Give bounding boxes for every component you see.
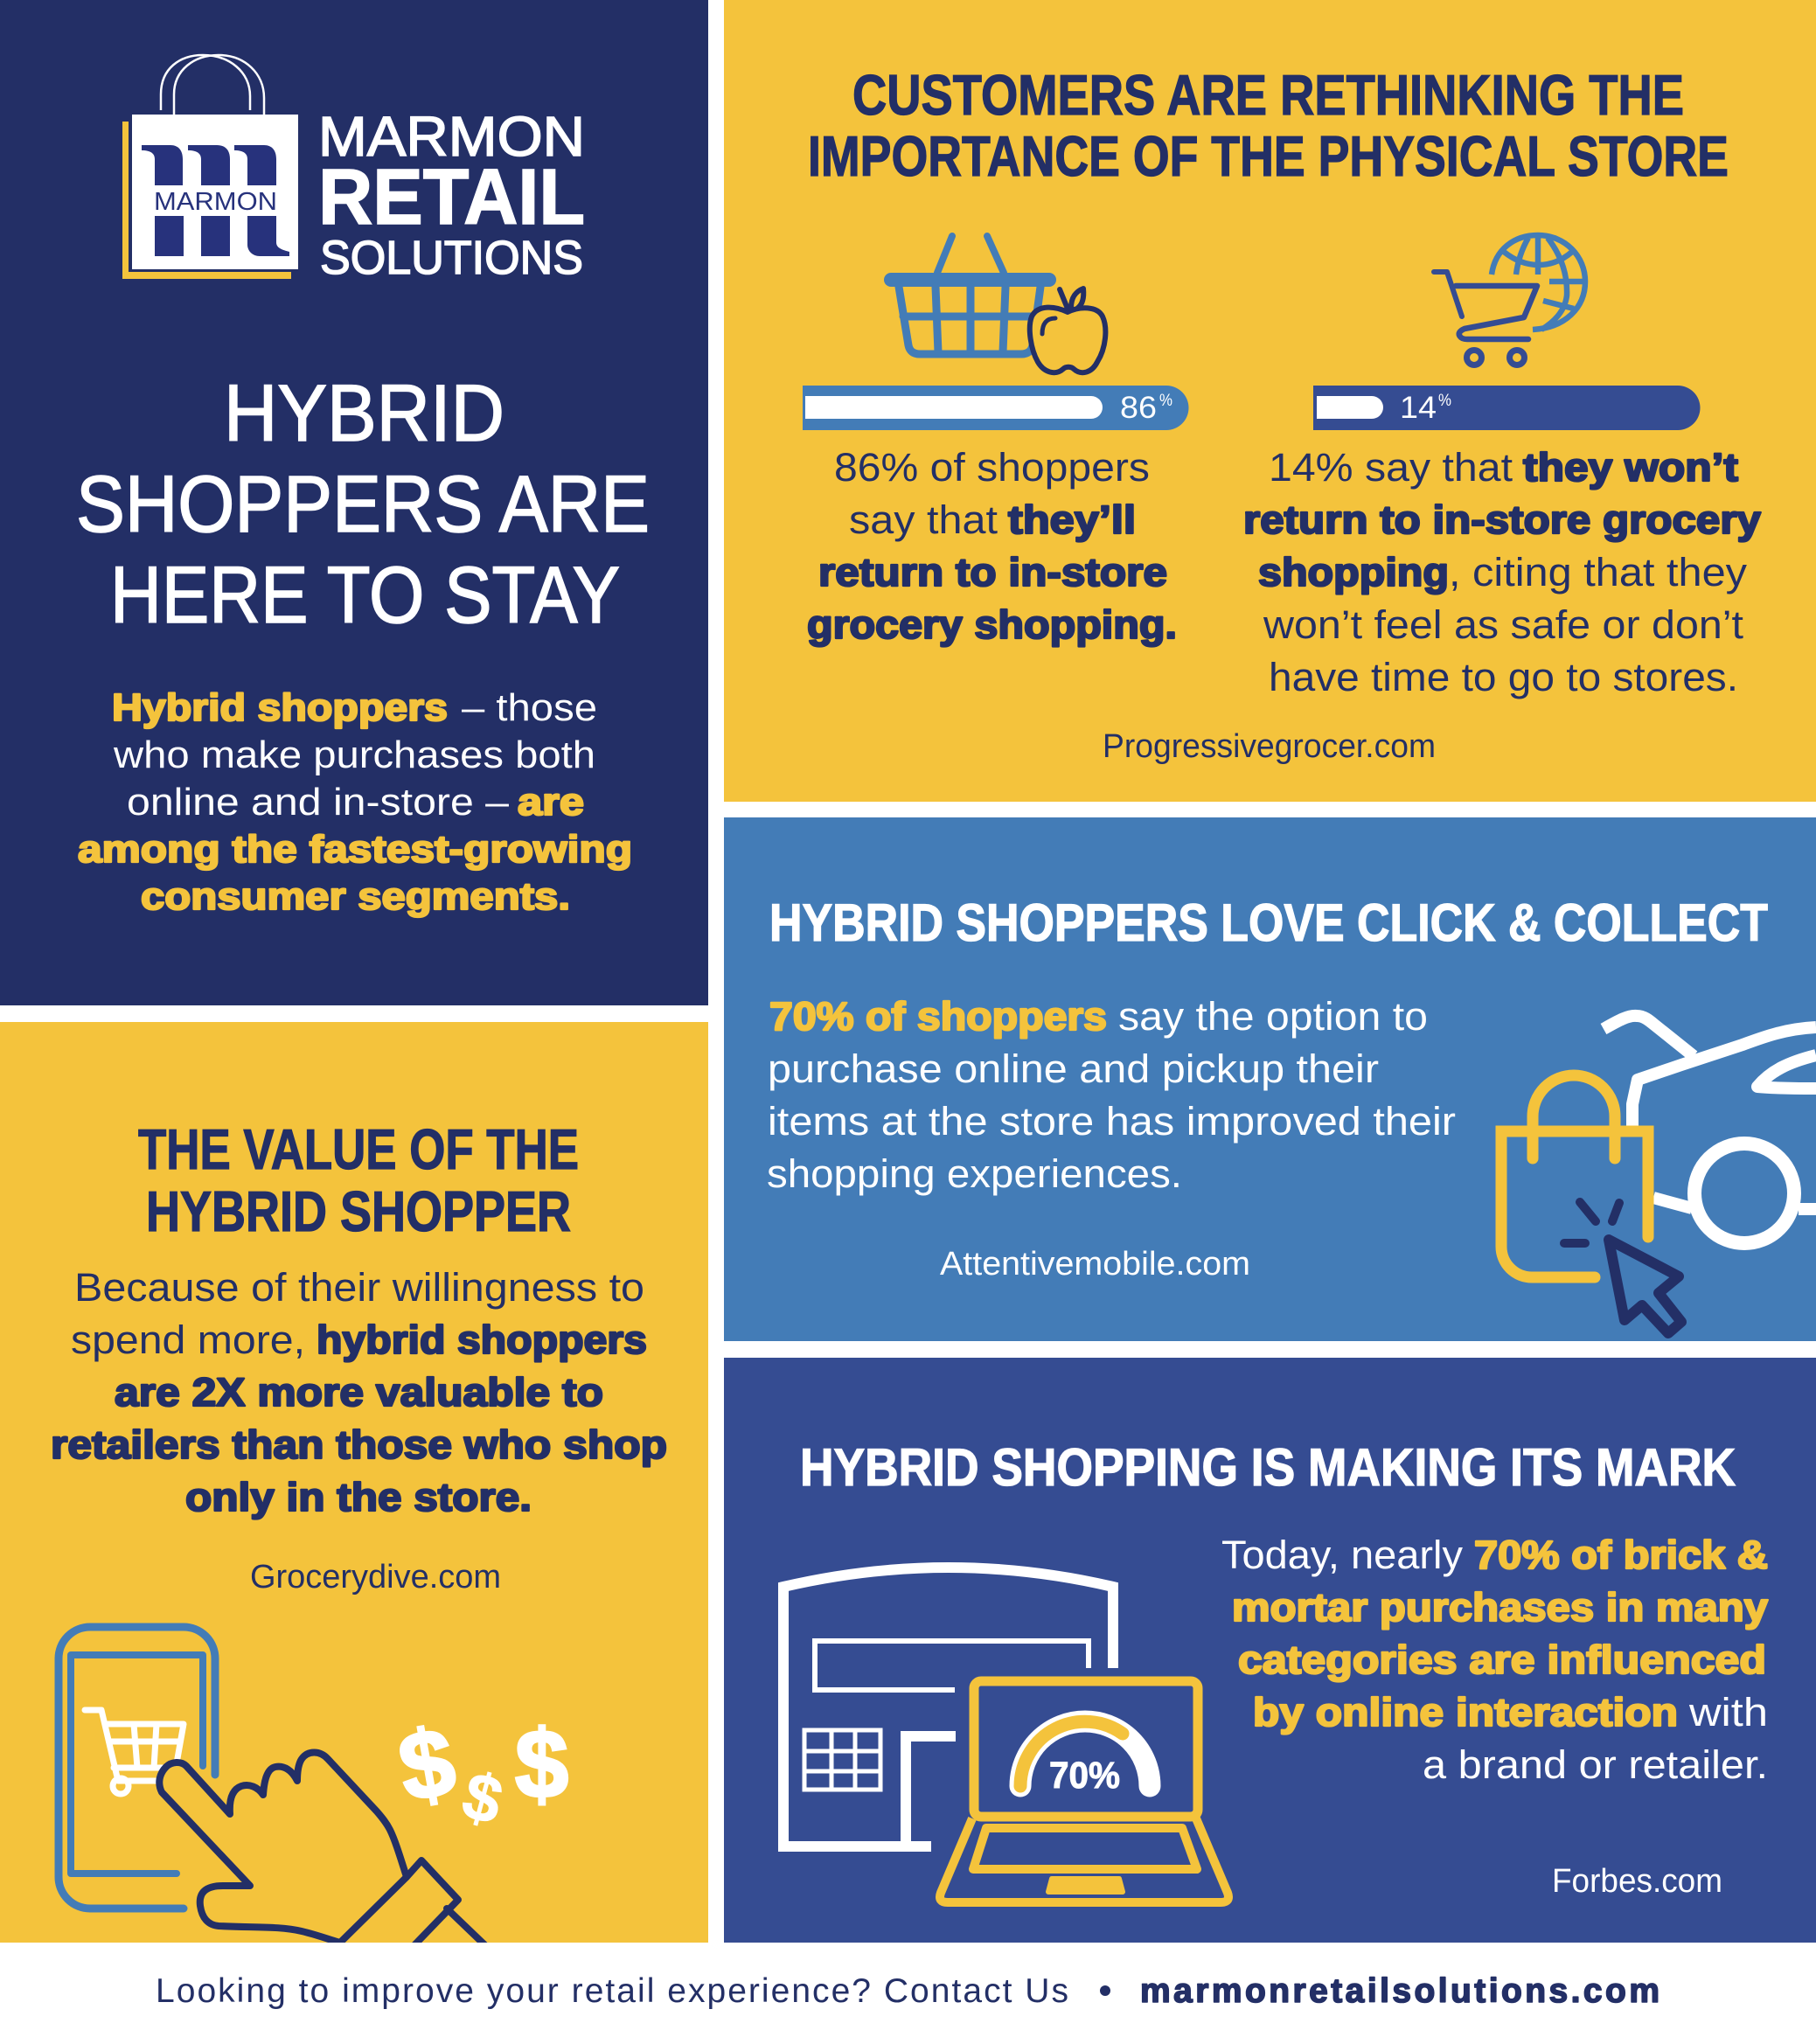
text block: 14 percent: 14% say that	[1269, 445, 1513, 490]
logo: Marmon Retail Solutions: RETAIL	[318, 154, 585, 241]
text block: with	[1688, 1690, 1768, 1735]
progress bar: 14%	[1313, 386, 1701, 430]
text block: 86 percent: say that	[849, 497, 998, 542]
text block: definition: consumer segments.	[141, 875, 570, 918]
text block: 14 percent: have time to go to stores.	[1269, 655, 1738, 699]
text block: definition: – those	[462, 686, 597, 729]
source: Attentivemobile.com	[940, 1246, 1250, 1283]
progress bar: 14%: 14	[1400, 391, 1437, 425]
gauge	[1020, 1721, 1150, 1797]
text block: 86 percent: grocery shopping.	[807, 602, 1177, 647]
text block: 86 percent: they’ll	[1008, 497, 1136, 542]
text block: definition: are	[518, 781, 584, 824]
panel: value of the hybrid shopper	[0, 1022, 708, 1950]
text block: categories are influenced	[1238, 1637, 1766, 1682]
icon: dollar signs	[392, 1707, 568, 1839]
footer: marmonretailsolutions.com	[1140, 1972, 1659, 2010]
text block: definition: online and in-store –	[127, 781, 510, 824]
text block: 14 percent: return to in-store grocery	[1243, 497, 1761, 542]
text block: mortar purchases in many	[1232, 1585, 1768, 1630]
icon: phone with cart and hand	[59, 1627, 490, 1950]
text block: definition: among the fastest-growing	[78, 828, 632, 871]
text block: Today, nearly	[1221, 1533, 1464, 1577]
heading	[138, 1117, 579, 1243]
heading: HYBRID SHOPPER	[146, 1179, 571, 1243]
title: HYBRID	[224, 369, 504, 458]
text block: retailers than those who shop	[51, 1422, 667, 1467]
text block: definition: Hybrid shoppers	[112, 686, 448, 729]
progress bar: 86%	[803, 386, 1189, 430]
text block	[767, 994, 1456, 1196]
text block: items at the store has improved their	[768, 1099, 1456, 1144]
icon: store	[783, 1568, 1113, 1846]
progress bar: 14%: %	[1438, 392, 1451, 410]
text block: 14 percent: they won’t	[1523, 445, 1738, 490]
source: Progressivegrocer.com	[1103, 728, 1436, 765]
text block: 86 percent: 86% of shoppers	[834, 445, 1150, 490]
text block: spend more,	[71, 1317, 305, 1362]
source: Grocerydive.com	[250, 1559, 501, 1596]
text block: say the option to	[1118, 994, 1428, 1039]
text block: definition	[78, 686, 632, 918]
panel: click and collect	[724, 817, 1816, 1341]
text block: 86 percent	[807, 445, 1177, 647]
logo: Marmon Retail Solutions	[122, 55, 585, 284]
progress bar: 86%: 86	[1120, 391, 1157, 425]
panel: intro	[0, 0, 708, 1005]
text block: 14 percent	[1243, 445, 1761, 699]
icon: cart and globe	[1434, 235, 1587, 365]
text block: 86 percent: return to in-store	[818, 550, 1167, 594]
text block: 14 percent: won’t feel as safe or don’t	[1263, 602, 1744, 647]
panel: rethinking the physical store	[724, 0, 1816, 802]
logo: Marmon Retail Solutions: MARMON	[154, 188, 277, 216]
panel: making its mark	[724, 1358, 1816, 1943]
icon: basket and apple	[884, 236, 1105, 372]
title: SHOPPERS ARE	[76, 460, 650, 549]
text block: 70% of brick &	[1474, 1533, 1768, 1577]
text block: only in the store.	[185, 1475, 532, 1519]
footer	[156, 1972, 1659, 2010]
icon: dollar signs: $	[515, 1711, 568, 1818]
text block: 14 percent: , citing that they	[1449, 550, 1748, 594]
text block: 14 percent: shopping	[1258, 550, 1449, 594]
text block: shopping experiences.	[767, 1151, 1182, 1196]
icon: car	[1604, 1016, 1816, 1243]
title	[76, 369, 650, 640]
text block: Because of their willingness to	[74, 1265, 644, 1310]
progress bar: 86%: %	[1159, 392, 1172, 410]
title: HERE TO STAY	[110, 551, 620, 640]
text block: hybrid shoppers	[317, 1317, 647, 1362]
logo: Marmon Retail Solutions: SOLUTIONS	[320, 232, 583, 284]
icon: dollar signs: $	[455, 1758, 510, 1839]
text block: by online interaction	[1253, 1690, 1678, 1735]
text block: are 2X more valuable to	[115, 1370, 603, 1415]
heading: THE VALUE OF THE	[138, 1117, 579, 1181]
text block: a brand or retailer.	[1423, 1742, 1768, 1787]
icon: laptop with gauge	[940, 1681, 1228, 1902]
logo: Marmon Retail Solutions: MARMON	[318, 105, 585, 168]
gauge: 70%	[1049, 1755, 1120, 1797]
heading	[808, 63, 1729, 188]
source: Forbes.com	[1552, 1863, 1722, 1900]
text block: 70% of shoppers	[769, 994, 1107, 1039]
icon: shopping bag	[1501, 1075, 1648, 1277]
text block	[1221, 1533, 1768, 1787]
icon: cursor click	[1564, 1202, 1681, 1333]
icon: dollar signs: $	[392, 1707, 463, 1823]
text block: purchase online and pickup their	[768, 1046, 1379, 1091]
footer: Looking to improve your retail experience? Contact Us	[156, 1972, 1068, 2010]
text block	[51, 1265, 667, 1519]
text block: definition: who make purchases both	[113, 733, 595, 776]
